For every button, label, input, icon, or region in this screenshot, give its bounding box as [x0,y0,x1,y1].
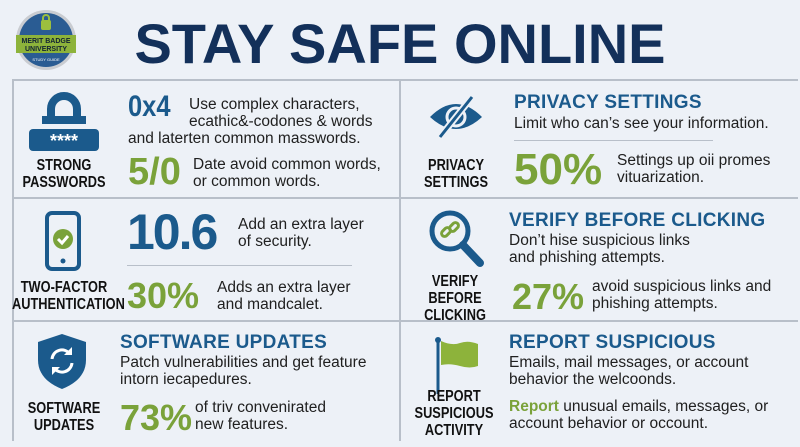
stat 5/0: or common words. [193,173,320,190]
panel: strong passwords [23,90,381,193]
text: Limit who can’s see your information. [514,115,769,132]
stat 50%: 50% [514,145,602,194]
label: UPDATES [34,417,94,434]
badge logo: UNIVERSITY [25,46,67,53]
stat 73%: 73% [120,397,192,438]
heading: VERIFY BEFORE CLICKING [509,210,765,231]
stat 5/0 [128,151,381,193]
stat 10.6: Add an extra layer [238,216,364,233]
label: TWO-FACTOR [21,279,107,296]
heading: SOFTWARE UPDATES [120,332,327,353]
panel: report suspicious [414,332,768,439]
stat 0x4: ecathic&-codones & words [189,113,373,130]
label: BEFORE [428,290,482,307]
stat 50%: vituarization. [617,169,704,186]
stat 10.6: 10.6 [127,204,216,260]
label [424,273,486,324]
stat 27%: avoid suspicious links and [592,278,771,295]
badge logo [16,10,76,70]
stat 30%: Adds an extra layer [217,279,351,296]
stat 0x4: and laterten common masswords. [128,130,361,147]
panel: privacy settings [424,92,770,194]
text [120,354,366,388]
text: Emails, mail messages, or account [509,354,748,371]
stat 0x4: Use complex characters, [189,96,360,113]
label: ACTIVITY [425,422,483,439]
badge logo: MERIT BADGE [22,38,71,45]
stat 0x4 [128,90,373,147]
title: STAY SAFE ONLINE [134,12,666,75]
label: PRIVACY [428,157,484,174]
heading: PRIVACY SETTINGS [514,92,702,113]
label: AUTHENTICATION [12,296,125,313]
label: REPORT [427,388,481,405]
text [509,354,748,388]
text: report: account behavior or occount. [509,415,708,432]
text: behavior the welcoonds. [509,371,676,388]
text: Patch vulnerabilities and get feature [120,354,366,371]
label: STRONG [37,157,91,174]
text [509,232,690,266]
label [414,388,493,439]
stat 10.6: of security. [238,233,312,250]
stat 30%: 30% [127,275,199,316]
text: report: Report unusual emails, messages, or [509,398,768,415]
stat 5/0: Date avoid common words, [193,156,381,173]
stat 5/0: 5/0 [128,151,181,193]
icon: flag [435,337,478,394]
label [28,400,100,434]
stat 73% [120,397,326,438]
label: SOFTWARE [28,400,100,417]
text: intorn iecapedures. [120,371,252,388]
stat 30% [127,275,351,316]
label: CLICKING [424,307,486,324]
text: report [509,398,768,432]
label [12,279,125,313]
icon: eye crossed [430,96,482,138]
stat 50%: Settings up oii promes [617,152,770,169]
icon: phone [45,211,81,271]
stat 27% [512,276,771,317]
stat 50% [514,145,770,194]
panel: two-factor [12,204,364,316]
text: and phishing attempts. [509,249,665,266]
label: SUSPICIOUS [415,405,493,422]
icon: shield [38,334,86,389]
label: SETTINGS [424,174,488,191]
panel: verify before clicking [424,210,771,324]
icon: lock: **** [50,131,78,151]
label: VERIFY [432,273,478,290]
label [23,157,105,191]
stat 73%: of triv convenirated [195,399,326,416]
stat 10.6 [127,204,364,260]
stat 27%: phishing attempts. [592,295,718,312]
stat 0x4: 0x4 [128,90,171,123]
stat 73%: new features. [195,416,288,433]
badge logo: STUDY GUIDE [32,57,60,62]
stat 30%: and mandcalet. [217,296,323,313]
label [424,157,488,191]
heading: REPORT SUSPICIOUS [509,332,716,353]
icon: magnifier [430,210,484,267]
stat 27%: 27% [512,276,584,317]
panel: software updates [28,332,366,438]
label: PASSWORDS [23,174,105,191]
text: Don’t hise suspicious links [509,232,690,249]
icon: lock [29,92,99,151]
